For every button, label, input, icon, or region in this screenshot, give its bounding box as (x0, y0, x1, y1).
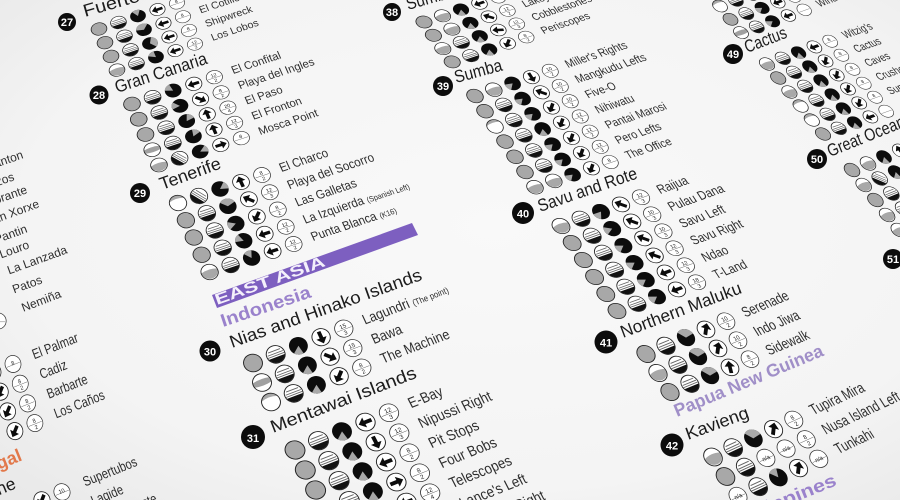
badge: 28 (90, 86, 108, 104)
row: T-Land: 18 (692, 277, 701, 285)
row: Pero Lefts: 12 (595, 142, 604, 149)
row: E-Bay (281, 382, 448, 463)
row: Nihiwatu (492, 90, 640, 153)
row: T-Land: T-Land (710, 257, 750, 282)
row: Mosca Point: 8 (238, 134, 244, 140)
row: Savu Left (569, 199, 731, 273)
row: Ndao: Ndao (698, 243, 732, 265)
heading: Kavieng: Kavieng (683, 402, 751, 444)
row: Nusa Island Left: 8 (802, 434, 809, 441)
badge: 28: 28 (93, 90, 105, 102)
row: Los Caños (0, 384, 109, 447)
row: Ndao: 12 (680, 260, 689, 268)
row: Witzig's: 8 (826, 37, 832, 42)
row: Pantai Marosi (502, 97, 672, 168)
row: Serenade: 10 (721, 316, 730, 324)
row: Ndao (592, 240, 735, 307)
row: Majanicho (88, 0, 243, 39)
row: The Machine (257, 323, 455, 417)
row: E-Bay: 3 (388, 414, 395, 421)
row: El Confital: 2 (213, 78, 219, 84)
row: The Machine: The Machine (378, 326, 452, 366)
row: Las Galletas: 8 (275, 205, 280, 211)
row: Savu Right (580, 214, 750, 290)
row: spot four (876, 200, 900, 224)
row: spot five (888, 221, 900, 239)
row: Cadiz: 2 (20, 385, 25, 392)
row: Lagundri: 3 (343, 330, 350, 337)
row: Los Caños: Los Caños (52, 386, 107, 422)
badge: 38 (383, 3, 401, 21)
row: E-Bay: 12 (383, 406, 393, 415)
row: Cactus: Cactus (850, 35, 885, 55)
row: Pit Stops: Pit Stops (425, 417, 482, 451)
row: Tupira Mira (698, 376, 871, 472)
row: Nipussi Right (291, 387, 496, 483)
row: Crushers (788, 58, 900, 116)
row: Mangkudu Lefts: 2 (560, 87, 566, 93)
row: El Cotillo: 8 (180, 13, 185, 18)
row: Serenade: 2 (726, 323, 732, 329)
row: Cadiz (0, 354, 71, 407)
row: Nihiwatu: Nihiwatu (593, 93, 637, 116)
row: Savu Left: 10 (658, 226, 667, 234)
row: Bawa (248, 318, 407, 397)
row: Four Bobs: Four Bobs (436, 434, 500, 471)
row: Nusa Island Left: n/a (782, 445, 793, 454)
row: Sidewalk (656, 325, 815, 405)
badge: 40: 40 (517, 208, 529, 220)
row: Playa del Ingles: Playa del Ingles (236, 56, 317, 92)
panel: Galicia spot names (0, 148, 69, 329)
row: Tunkahi (723, 422, 880, 500)
panel: Kavieng spots (698, 366, 900, 500)
row: Las Galletas: 2 (277, 211, 282, 217)
row: Bawa: 15 (348, 343, 357, 351)
row: La Izquierda (Spanish Left): 12 (281, 222, 289, 229)
badge: 42: 42 (666, 440, 678, 452)
row: Pulau Dana: Pulau Dana (665, 181, 727, 214)
row: Tupira Mira: Tupira Mira (806, 379, 868, 418)
row: Nipussi Right: 3 (398, 434, 405, 441)
row: Nipussi Right: 12 (393, 426, 404, 435)
row: Lagundri (240, 280, 452, 376)
row: Caves: 8 (849, 65, 854, 70)
row: Cactus: 8 (837, 51, 843, 56)
row: E-Bay: E-Bay (405, 382, 446, 411)
row: El Fronton: El Fronton (250, 95, 304, 122)
row: El Palmar (0, 329, 81, 383)
row: Nusa Island Left: 2 (806, 441, 813, 448)
row: Indo Jiwa (643, 304, 806, 387)
row: Cobblestones: 3 (516, 24, 522, 29)
row: Raijua: 12 (636, 192, 645, 200)
row: Nusa Island Left: n/a (761, 454, 772, 463)
panel: Fuerteventura spots (88, 0, 263, 80)
row: Tunkahi: n/a (814, 455, 825, 464)
panel: Western Australia top spots (708, 0, 852, 43)
panel: Galicia spot names: Nemiña (19, 287, 63, 315)
row: Savu Left: 3 (663, 232, 669, 239)
badge: 30 (200, 340, 220, 362)
row: Los Caños: 8 (32, 418, 37, 425)
row: Punta Blanca (K16): 2 (293, 245, 298, 251)
row: Miller's Rights: Miller's Rights (563, 40, 631, 71)
row: El Confital (121, 47, 284, 115)
row: Telescopes (393, 452, 516, 500)
row: Playa del Socorro: 12 (265, 187, 273, 195)
row: Five-O: 2 (570, 102, 576, 108)
row: Miller's Rights: 10 (545, 66, 554, 73)
panel: Cadiz spots (0, 327, 109, 447)
row: Supertubes (799, 69, 900, 130)
row: Cadiz: 8 (17, 379, 22, 386)
row: spot one (708, 0, 779, 16)
heading: Indonesia: Indonesia (218, 282, 314, 331)
row: El Charco: 8 (259, 171, 264, 177)
row: Sidewalk: 8 (746, 355, 752, 361)
row: Playa del Socorro: Playa del Socorro (285, 150, 377, 192)
row: Pantai Marosi: 12 (585, 127, 594, 134)
heading: Nias and Hinako Islands: Nias and Hinako Islands (227, 264, 425, 352)
row: La Izquierda (Spanish Left) (190, 177, 413, 266)
panel: Galicia spot names: La Lanzada (5, 243, 69, 277)
row: Shipwreck: 8 (186, 26, 191, 31)
panel: Nias and Hinako spots (240, 280, 471, 417)
row: Ndao: 3 (686, 266, 692, 273)
panel: Cactus spots (756, 14, 900, 143)
row: Los Lobos: 2 (194, 44, 199, 50)
row: El Paso: El Paso (243, 84, 285, 107)
panel: Peniche spots (27, 450, 159, 500)
row: Los Caños: 2 (34, 425, 39, 431)
badge: 49 (723, 44, 743, 64)
row: The Office: 8 (606, 158, 613, 164)
badge: 27: 27 (61, 17, 73, 29)
row: El Confital: El Confital (230, 50, 283, 77)
row: Lagundri: Lagundri (The point) (360, 281, 451, 327)
banner: East Asia: EAST ASIA (213, 253, 327, 309)
row: Lagundri: 15 (339, 323, 348, 331)
row: El Fronton: 12 (230, 118, 238, 125)
row: Lakey Peak (421, 0, 579, 45)
row: Four Bobs (312, 433, 501, 500)
badge: 49: 49 (727, 49, 739, 61)
heading: Northern Maluku: Northern Maluku (617, 278, 744, 342)
row: Witzig's (756, 19, 877, 73)
row: Tupira Mira: 8 (790, 415, 797, 422)
row: Pit Stops: 8 (405, 447, 412, 455)
row: Pantai Marosi: 2 (590, 132, 596, 138)
badge: 50 (807, 149, 827, 169)
row: Five-O: 10 (565, 97, 574, 103)
row: Pulau Dana: 3 (652, 215, 658, 222)
heading: Mentawai Islands: Mentawai Islands (267, 362, 419, 437)
row: El Charco: 2 (261, 176, 267, 182)
badge: 29 (130, 183, 150, 203)
row: last Cactus spot (812, 102, 897, 143)
row: The Machine: 2 (361, 369, 368, 376)
row: Mangkudu Lefts: 10 (555, 81, 564, 88)
row: Punta Blanca (K16) (197, 200, 401, 285)
row: Witzig's: Witzig's (839, 21, 876, 41)
row: Mosca Point: Mosca Point (257, 107, 321, 138)
badge: 51: 51 (887, 254, 899, 266)
row: Caves (777, 48, 896, 102)
row: Supertubos (27, 451, 141, 500)
row: Windan (729, 0, 852, 43)
row: The Office (522, 133, 677, 199)
row: La Izquierda (Spanish Left): 2 (285, 228, 290, 234)
badge: 29: 29 (134, 188, 146, 200)
badge: 50: 50 (811, 154, 823, 166)
row: Periscopes: Periscopes (538, 10, 593, 37)
row: Las Galletas (181, 173, 361, 250)
row: El Paso (134, 82, 286, 145)
row: Telescopes: 12 (424, 486, 435, 495)
badge: 31 (241, 425, 265, 449)
row: Pantai Marosi: Pantai Marosi (603, 101, 669, 131)
row: Sidewalk: Sidewalk (762, 327, 813, 358)
row: Lakey Peak: 12 (502, 6, 511, 12)
row: Lakey Peak: 2 (507, 11, 512, 16)
row: El Charco (165, 143, 333, 216)
row: La Izquierda (Spanish Left): La Izquierda (Spanish Left) (300, 178, 412, 227)
row: El Fronton (141, 94, 305, 160)
row: El Paso: 20 (223, 103, 232, 110)
heading: Savu and Rote: Savu and Rote (535, 163, 640, 216)
row: spot two (851, 160, 900, 196)
row: Pero Lefts: 3 (600, 148, 606, 154)
row: Pero Lefts (512, 117, 667, 183)
row: Pero Lefts: Pero Lefts (613, 121, 665, 147)
row: Telescopes: Telescopes (446, 452, 515, 491)
row: Barbarte: 8 (25, 398, 30, 405)
row: Crushers: 8 (860, 79, 866, 84)
badge: 39 (433, 76, 453, 96)
row: spot two (718, 0, 806, 29)
banner: East Asia (212, 223, 418, 309)
row: Shipwreck: Shipwreck (204, 4, 255, 30)
badge: 41: 41 (600, 338, 612, 350)
row: spot one (840, 141, 900, 180)
row: Playa del Ingles (127, 53, 318, 131)
row: Savu Right: Savu Right (687, 216, 747, 248)
badge: 39: 39 (437, 81, 449, 93)
row: Playa del Socorro: 3 (269, 193, 275, 200)
row: Los Lobos (106, 15, 262, 80)
row: Mangkudu Lefts: Mangkudu Lefts (573, 52, 650, 86)
row: Five-O (482, 77, 622, 138)
row: T-Land (603, 254, 753, 324)
row: El Paso: 4 (227, 108, 232, 114)
row: Bawa: Bawa (369, 321, 405, 347)
row: El Palmar: El Palmar (30, 329, 81, 363)
row: Savu Right: 3 (674, 249, 680, 256)
panel: Sumbawa spots (412, 0, 606, 72)
panel: Gran Canaria spots (121, 39, 339, 177)
heading: Sumba: Sumba (452, 55, 505, 87)
row: Barbarte: Barbarte (44, 370, 90, 402)
row: Pulau Dana (558, 179, 730, 256)
badge: 31: 31 (247, 433, 259, 445)
row: Sidewalk: 2 (750, 361, 756, 367)
row: Periscopes (440, 8, 595, 72)
row: Cadiz: Cadiz (37, 356, 69, 382)
row: Raijua: Raijua (654, 173, 691, 197)
row: Los Lobos: 12 (191, 40, 198, 46)
row: Punta Blanca (K16): Punta Blanca (K16) (308, 202, 399, 244)
row: Bawa: 3 (352, 350, 359, 356)
badge: 41 (594, 330, 618, 354)
row: The Office: The Office (623, 136, 675, 162)
panel: Savu and Rote spots (547, 162, 775, 324)
row: Periscopes: 8 (522, 33, 528, 38)
row: Five-O: Five-O (583, 80, 619, 101)
row: Raijua: 3 (641, 198, 647, 205)
row: Serenade (631, 285, 795, 368)
badge: 30: 30 (204, 346, 216, 358)
row: Serenade: Serenade (738, 287, 792, 320)
row: Four Bobs: 2 (419, 474, 426, 481)
row: Miller's Rights (462, 36, 633, 107)
row: Mosca Point (147, 104, 323, 177)
badge: 27 (58, 13, 76, 31)
row: T-Land: 3 (697, 283, 703, 290)
row: Four Bobs: 8 (416, 467, 423, 475)
row: Shipwreck (100, 1, 257, 67)
row: El Palmar: 8 (11, 361, 15, 367)
row: El Confital: 12 (210, 72, 218, 79)
row: Playa del Ingles: 8 (218, 88, 223, 94)
row: Los Lobos: Los Lobos (210, 18, 261, 43)
panel: Tenerife spots (165, 124, 422, 285)
badge: 40 (512, 202, 534, 224)
row: Miller's Rights: 2 (550, 72, 556, 78)
row: The Machine: 8 (358, 363, 365, 369)
badge: 42 (660, 434, 684, 456)
row: spot three (864, 185, 900, 209)
row: Pulau Dana: 10 (647, 209, 656, 217)
row: Savu Left: Savu Left (676, 202, 729, 231)
row: Cobblestones: 12 (512, 19, 520, 25)
row: Playa del Socorro (173, 148, 379, 233)
panel: Sumba spots (462, 33, 702, 199)
row: Mangkudu Lefts (472, 48, 652, 123)
row: Periscopes: 2 (526, 37, 531, 42)
badge: 51 (883, 249, 900, 269)
row: Pit Stops (302, 416, 484, 500)
row: Caves: Caves (862, 50, 893, 69)
panel: Northern Maluku spots (631, 285, 819, 405)
heading: Cactus: Cactus (741, 22, 790, 57)
row: El Fronton: 3 (234, 124, 239, 130)
row: Pit Stops: 2 (409, 454, 416, 461)
row: Tupira Mira: 2 (794, 421, 801, 428)
row: Nihiwatu: 2 (580, 117, 586, 123)
panel: Galicia spot names: Patos (10, 273, 44, 296)
row: Tunkahi: Tunkahi (831, 426, 877, 457)
row: Indo Jiwa: 10 (733, 335, 742, 343)
row: Barbarte (0, 368, 92, 427)
row: Indo Jiwa: 2 (738, 342, 744, 348)
row: Supertubos: 10 (58, 488, 66, 496)
heading: Gran Canaria: Gran Canaria (112, 48, 210, 97)
row: Indo Jiwa: Indo Jiwa (750, 307, 803, 339)
heading: Papua New Guinea: Papua New Guinea (671, 340, 827, 421)
row: Nusa Island Left (713, 388, 900, 488)
row: Savu Right: 12 (669, 243, 678, 251)
row: Cobblestones (431, 0, 596, 58)
row: Barbarte: 2 (27, 405, 32, 412)
row: El Cotillo (94, 0, 243, 53)
heading: Tenerife: Tenerife (157, 153, 224, 194)
row: El Charco: El Charco (277, 145, 331, 175)
row: Punta Blanca (K16): 12 (289, 239, 297, 246)
row: Las Galletas: Las Galletas (293, 176, 359, 209)
badge: 38: 38 (386, 7, 398, 19)
row: Supertubos: Supertubos (80, 454, 139, 490)
row: Raijua (547, 171, 694, 239)
row: Playa del Ingles: 2 (220, 93, 226, 99)
row: Nipussi Right: Nipussi Right (415, 387, 495, 431)
row: top spot (412, 0, 509, 31)
row: Cactus (766, 33, 887, 88)
panel: Mentawai spots (281, 366, 548, 500)
row: Nihiwatu: 12 (575, 112, 584, 119)
panel: Great Ocean spots (840, 141, 900, 239)
row: Supertubes: 8 (871, 93, 877, 98)
